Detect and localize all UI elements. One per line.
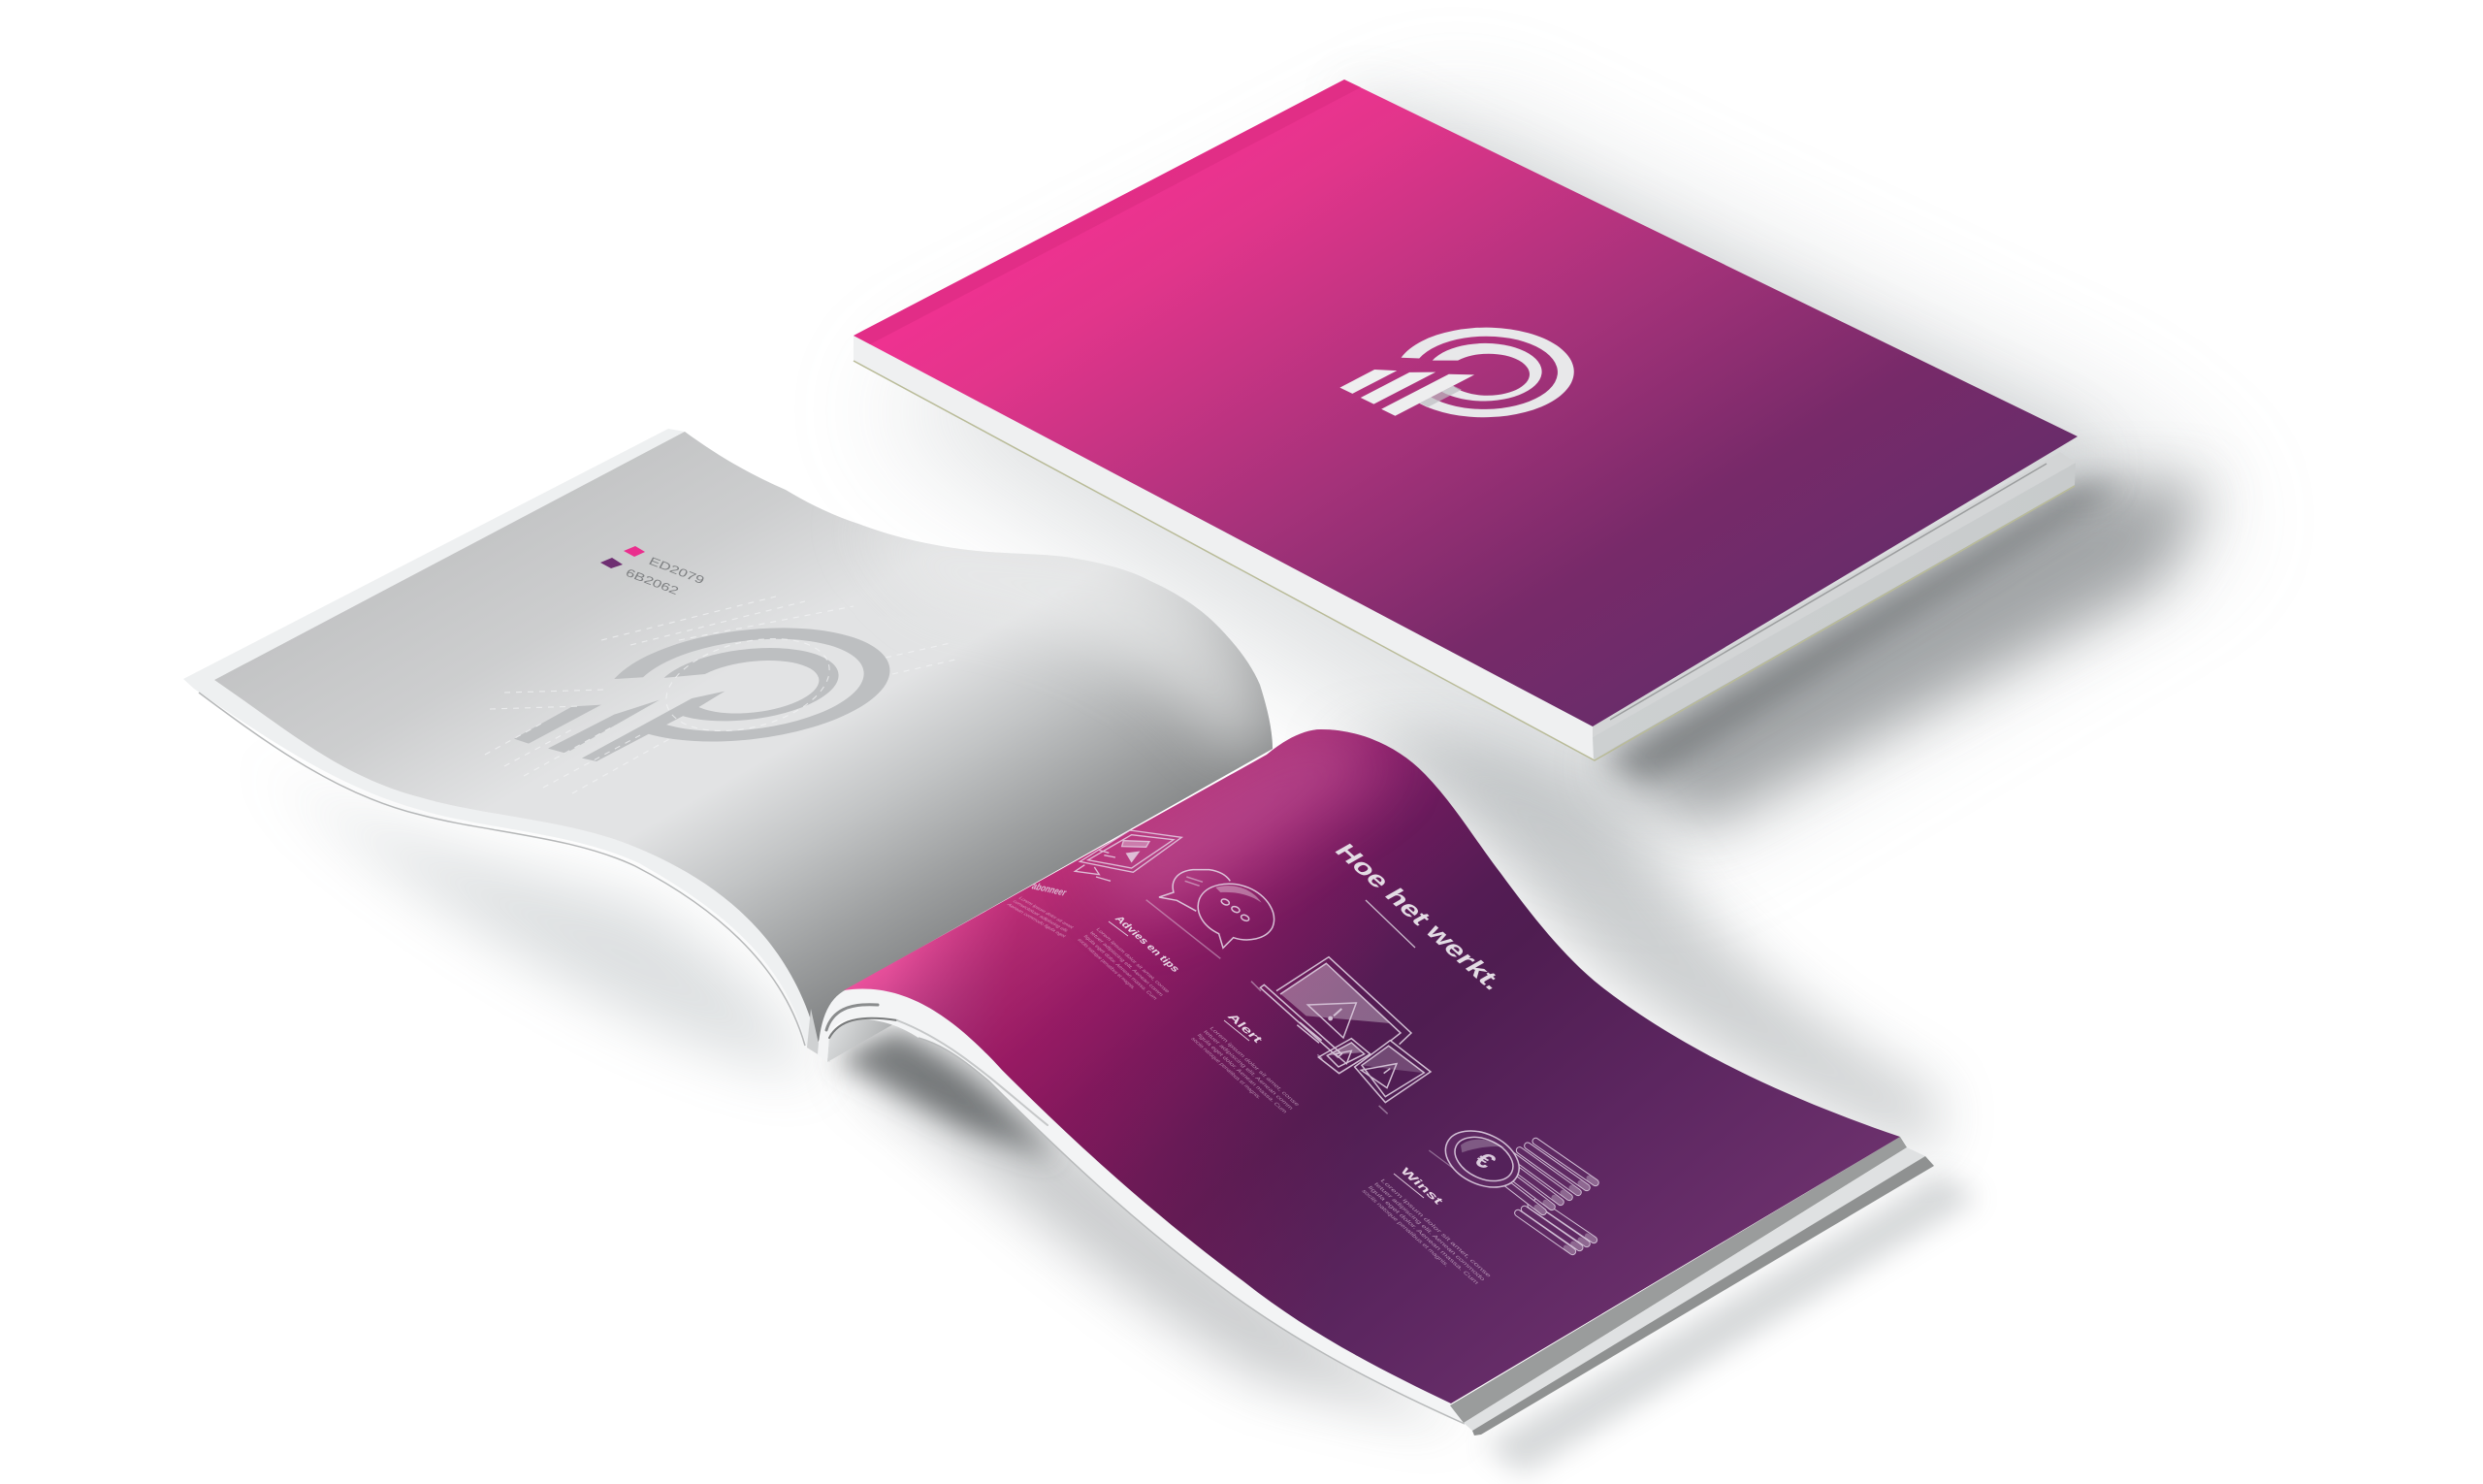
page stack lower line bbox=[919, 1038, 1465, 1424]
illustration: brochure mockup scene bbox=[184, 75, 2244, 1479]
cover logo: stem stripe bbox=[1381, 368, 1474, 416]
cover logo: short stripe bbox=[1339, 365, 1397, 394]
icon: alert devices bbox=[1251, 957, 1431, 1113]
icon: euro coin and stacks: € bbox=[1467, 1148, 1502, 1173]
body text: abonneer bbox=[1005, 896, 1080, 939]
open brochure: spine and arch bbox=[807, 988, 1465, 1424]
icon: euro coin and stacks bbox=[1429, 1120, 1596, 1251]
arch inner face bbox=[827, 1018, 893, 1062]
body text: advice: ligula eget dolor. Aenean massa. Cum bbox=[1082, 934, 1158, 1001]
color label: ED2079: ED2079 bbox=[646, 555, 706, 587]
left page: lighting bbox=[1061, 586, 1273, 768]
left page: lower sheet line bbox=[199, 693, 805, 1046]
closed brochure: top pages bbox=[1593, 452, 2076, 737]
body text: alert: Lorem ipsum dolor sit amet, conse bbox=[1208, 1026, 1301, 1108]
cover logo: soft shadow at stem bbox=[1420, 386, 1462, 407]
left page: gray sheet bbox=[214, 432, 1273, 1044]
open brochure: left page bbox=[183, 429, 1273, 1062]
label: Advies en tips: Advies en tips bbox=[1113, 915, 1181, 974]
right page: sheet bbox=[844, 729, 1900, 1403]
inner page layers bbox=[826, 1005, 1048, 1125]
label underline: alert bbox=[1224, 1020, 1249, 1041]
closed brochure: cover bbox=[854, 80, 2078, 726]
body text: alert: ligula eget dolor. Aenean massa. Cum bbox=[1196, 1033, 1287, 1114]
label: Winst: Winst bbox=[1398, 1166, 1447, 1207]
color chip: pink bbox=[624, 546, 645, 557]
body text: alert: tetuer adipiscing elit. Aenean comm bbox=[1202, 1030, 1294, 1111]
closed brochure: page block right side bbox=[1593, 463, 2076, 759]
spine foot bbox=[807, 1009, 830, 1062]
closed brochure: spine hinge band bbox=[854, 80, 1361, 344]
ground shadows bbox=[223, 87, 2231, 1474]
color label: 6B2062: 6B2062 bbox=[623, 566, 681, 597]
cover logo: outer ring bbox=[1359, 309, 1611, 436]
construction logo bbox=[514, 607, 949, 762]
fore edge: gray band bbox=[1450, 1137, 1907, 1423]
label: Alert: Alert bbox=[1225, 1012, 1267, 1045]
body text: winst: tetuer adipiscing elit. Aenean commodo bbox=[1372, 1181, 1487, 1282]
body text: advice: sociis natoque penatibus et magnis. bbox=[1076, 938, 1137, 990]
body text: alert bbox=[1189, 1026, 1301, 1118]
label underline: advice bbox=[1109, 921, 1128, 936]
body text: abonneer: Aenean commodo ligula eget bbox=[1005, 903, 1068, 939]
body text: winst: ligula eget dolor. Aenean massa. Cum bbox=[1367, 1185, 1480, 1285]
cover logo: inner ring bbox=[1403, 332, 1565, 413]
closed brochure: page layer line bbox=[1610, 464, 2047, 720]
heading underline bbox=[1366, 900, 1415, 948]
icon: chat bubbles bbox=[1146, 870, 1274, 958]
fore edge: light band bbox=[1464, 1147, 1925, 1431]
construction logo: stripes bbox=[514, 692, 725, 761]
body text: alert: sociis natoque penatibus et magnis. bbox=[1189, 1037, 1262, 1100]
icon: monitor bbox=[1075, 830, 1181, 881]
body text: advice: tetuer adipiscing elit. Aenean comm bbox=[1088, 931, 1164, 997]
open brochure: right page bbox=[834, 718, 1934, 1436]
construction guide lines bbox=[485, 597, 955, 793]
color chip: purple bbox=[600, 558, 623, 568]
closed brochure: page block left side bbox=[854, 336, 1595, 760]
closed brochure bbox=[854, 80, 2078, 760]
heading: Hoe het werkt.: Hoe het werkt. bbox=[1329, 839, 1510, 994]
closed brochure: olive edge line bbox=[854, 361, 2075, 760]
cover logo: middle stripe bbox=[1361, 366, 1435, 404]
body text: abonneer: consectetuer adipiscing elit. bbox=[1011, 899, 1070, 933]
body text: winst bbox=[1360, 1178, 1493, 1289]
body text: winst: Lorem ipsum dolor sit amet, conse bbox=[1378, 1178, 1493, 1278]
body text: winst: sociis natoque penatibus et magnis. bbox=[1360, 1189, 1450, 1268]
construction logo: rings bbox=[546, 607, 949, 762]
body text: advice: Lorem ipsum dolor sit amet, conse bbox=[1094, 927, 1170, 994]
cover logo bbox=[1335, 309, 1611, 448]
left page: paper edges bbox=[183, 429, 830, 1062]
page stack along right page bbox=[818, 988, 1465, 1424]
body text: abonneer: Lorem ipsum dolor sit amet bbox=[1016, 896, 1076, 930]
label underline: winst bbox=[1394, 1174, 1424, 1198]
fore edge: dark lower sheets bbox=[1472, 1156, 1934, 1436]
label: abonneer: abonneer bbox=[1030, 882, 1069, 898]
right page: lighting bbox=[916, 729, 1395, 1294]
